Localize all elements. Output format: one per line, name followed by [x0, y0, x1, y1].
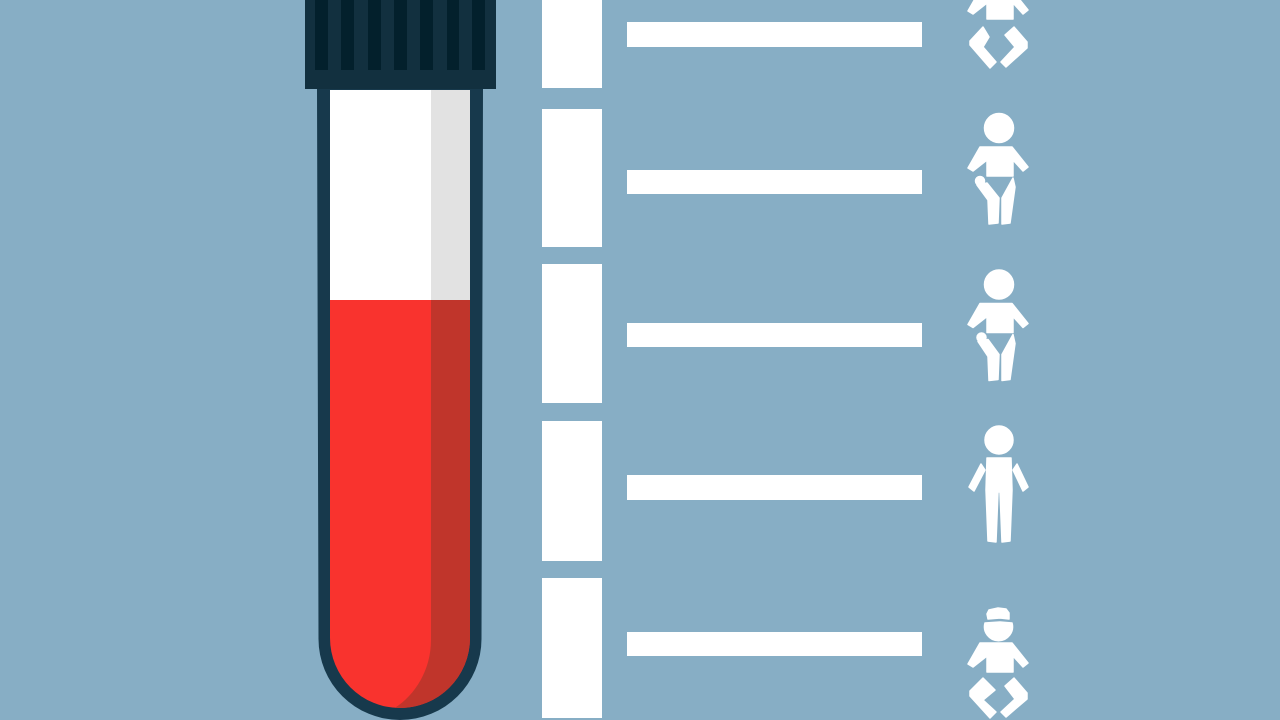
tube cap — [305, 0, 496, 89]
blood test tube — [305, 0, 496, 720]
blood fill — [330, 300, 470, 708]
icon: toddler with diaper — [968, 270, 1028, 380]
icon: baby with cap, bottom — [968, 608, 1028, 718]
icon: standing infant with diaper — [968, 114, 1028, 224]
white scale column — [542, 0, 602, 718]
icon: standing child — [969, 426, 1028, 542]
icon: crawling baby, top — [968, 0, 1028, 68]
label bars — [627, 22, 922, 656]
tube outline — [317, 88, 483, 720]
tube empty section — [330, 90, 470, 300]
